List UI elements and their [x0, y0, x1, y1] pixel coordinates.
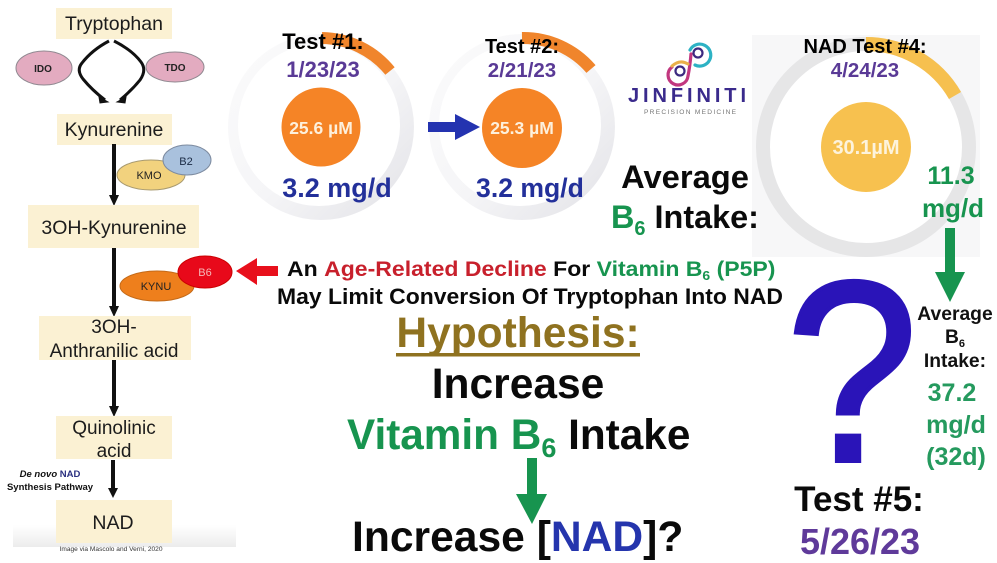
step: NAD: NAD — [92, 512, 134, 534]
wordmark: JINFINITI — [628, 85, 746, 107]
enzyme: TDO — [146, 52, 204, 82]
label: Average B6 Intake (right): 6 — [959, 338, 965, 350]
enzyme: KYNU: KYNU — [141, 281, 171, 293]
label: De novo NAD Synthesis Pathway: Synthesis Pathway — [7, 482, 94, 493]
arrow: red pointer to B6 — [236, 258, 278, 285]
heading: Hypothesis: Hypothesis: — [396, 310, 640, 357]
statement: age-related decline: 6 — [702, 268, 710, 283]
step: 3OH-Kynurenine — [28, 205, 199, 248]
intake: 37.2 mg/d (32d): (32d) — [926, 443, 986, 471]
text: Increase [NAD]?: Increase [NAD]? — [352, 513, 683, 561]
enzyme: IDO — [16, 51, 72, 85]
cofactor: B6: B6 — [198, 267, 212, 279]
panel: de novo NAD synthesis pathway — [7, 8, 236, 553]
cofactor: B2 — [163, 145, 211, 175]
step: NAD — [56, 500, 172, 543]
intake: 37.2 mg/d (32d): 37.2 — [928, 379, 976, 407]
label: Average B6 Intake: 6 — [634, 218, 646, 240]
cofactor: B2: B2 — [179, 156, 193, 168]
enzyme: KMO — [117, 160, 185, 190]
cofactor: B6 — [178, 256, 232, 288]
step: Tryptophan: Tryptophan — [65, 13, 163, 35]
result circle: 25.3 µM: 25.3 µM — [490, 118, 554, 138]
curved arrows: Tryptophan to Kynurenine — [79, 41, 144, 103]
step: Tryptophan — [56, 8, 172, 39]
label: De novo NAD Synthesis Pathway — [7, 469, 94, 493]
label: Average B6 Intake: Average — [621, 158, 749, 195]
result circle: 25.6 µM — [282, 88, 360, 166]
progress arc — [866, 44, 955, 96]
label: Average B6 Intake — [611, 158, 759, 240]
date: 2/21/23: 2/21/23 — [488, 59, 556, 82]
image credit: Image via Mascolo and Verni, 2020 — [60, 546, 163, 553]
label: Average B6 Intake (right): Intake: — [924, 351, 986, 372]
enzyme: IDO: IDO — [34, 64, 52, 75]
step: 3OH-Anthranilic acid: 3OH- — [91, 317, 137, 338]
date: 1/23/23: 1/23/23 — [286, 57, 360, 82]
step: Quinolinic acid: Quinolinic — [72, 418, 156, 439]
arrow: blue arrow between tests — [428, 114, 480, 140]
label: Average B6 Intake: Intake: — [646, 199, 759, 235]
intake: 3.2 mg/d: 3.2 mg/d — [282, 173, 392, 203]
statement: age-related decline: (P5P) — [710, 257, 775, 281]
intake: 37.2 mg/d (32d): mg/d — [926, 411, 986, 439]
intake: 11.3 mg/d: 11.3 — [927, 162, 975, 190]
progress arc — [322, 38, 390, 71]
text: Vitamin B6 Intake: Intake — [556, 411, 690, 458]
arrow: Quinolinic acid to NAD — [108, 460, 118, 498]
result circle: 30.1 µM: 30.1µM — [832, 137, 900, 159]
arrow: green arrow down to NAD — [516, 458, 547, 524]
step: Kynurenine — [57, 114, 172, 145]
heading: Test #2: Test #2: — [485, 36, 559, 58]
tagline: PRECISION MEDICINE — [644, 109, 737, 116]
intake: 37.2 mg/d (32d) — [926, 379, 986, 471]
result circle: 25.6 µM: 25.6 µM — [289, 118, 353, 138]
arrow: 3OH-Kynurenine to 3OH-Anthranilic acid — [109, 248, 119, 317]
result circle: 30.1 µM — [821, 102, 911, 192]
label: Average B6 Intake (right) — [917, 304, 993, 372]
icon: infinity mark — [668, 44, 711, 85]
intake: 11.3 mg/d: mg/d — [922, 193, 984, 223]
statement: age-related decline: May Limit Conversion Of Tryptophan Into NAD — [277, 284, 783, 309]
logo: Jinfiniti Precision Medicine — [628, 44, 746, 116]
icon: large question mark: ? — [786, 228, 918, 516]
date: 5/26/23: 5/26/23 — [800, 521, 920, 562]
statement: age-related decline: An Age-Related Decline For Vitamin B — [287, 257, 702, 281]
arrow: green arrow down to test 5 — [935, 228, 965, 302]
intake: 11.3 mg/d — [922, 162, 984, 223]
progress arc — [522, 38, 591, 69]
enzyme: KYNU — [120, 271, 194, 301]
text: Vitamin B6 Intake: 6 — [541, 433, 556, 463]
label: De novo NAD Synthesis Pathway: De novo NAD — [20, 469, 80, 480]
heading: Test #1: Test #1: — [282, 29, 364, 54]
label: Average B6 Intake (right): Average — [917, 304, 993, 325]
statement: age-related decline — [277, 257, 783, 309]
intake: 3.2 mg/d: 3.2 mg/d — [476, 173, 584, 203]
step: Quinolinic acid — [56, 416, 172, 462]
panel: Test 1 — [228, 29, 414, 220]
arrow: Kynurenine to 3OH-Kynurenine — [109, 144, 119, 206]
step: Quinolinic acid: acid — [97, 441, 131, 462]
result circle: 25.3 µM — [482, 88, 562, 168]
arrow: 3OH-Anthranilic acid to Quinolinic acid — [109, 360, 119, 417]
panel: NAD Test 4 — [752, 35, 984, 257]
label: Average B6 Intake (right): B — [945, 327, 959, 348]
panel: Test 2 — [429, 34, 615, 220]
text: Vitamin B6 Intake: Vitamin B — [347, 411, 541, 458]
step: 3OH-Anthranilic acid: Anthranilic acid — [50, 341, 178, 362]
heading: NAD Test #4: NAD Test #4: — [804, 36, 926, 58]
step: Kynurenine: Kynurenine — [65, 119, 163, 141]
text: Increase: Increase — [432, 361, 604, 408]
step: 3OH-Kynurenine: 3OH-Kynurenine — [41, 217, 187, 239]
date: 4/24/23: 4/24/23 — [831, 59, 899, 82]
enzyme: KMO: KMO — [136, 170, 162, 182]
label: Average B6 Intake: B — [611, 199, 634, 235]
enzyme: TDO: TDO — [164, 63, 186, 74]
heading: Test #5: Test #5: — [794, 480, 924, 519]
step: 3OH-Anthranilic acid — [39, 316, 191, 362]
